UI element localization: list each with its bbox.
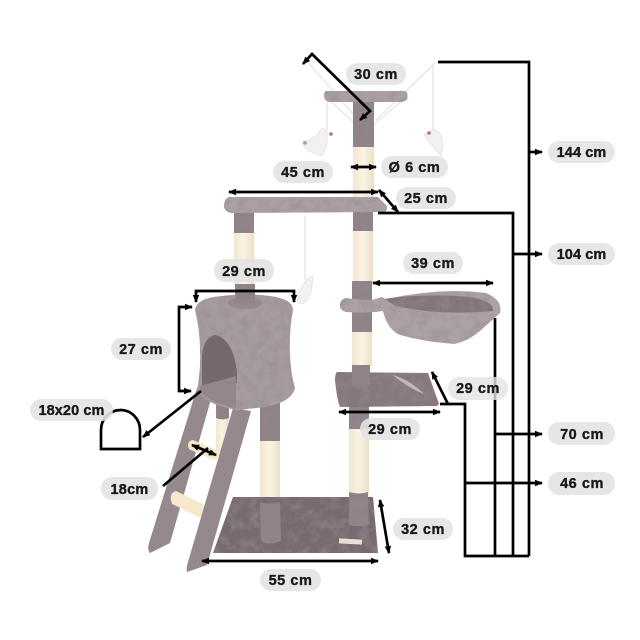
rear ladder rail — [148, 388, 213, 553]
arrow: 6 cm diameter — [351, 166, 376, 168]
label: 25 cm — [396, 187, 456, 209]
label: 104 cm: 104 cm — [557, 247, 606, 263]
top platform — [324, 91, 408, 102]
144 cm leader — [438, 62, 529, 556]
label: 25 cm: 25 cm — [404, 191, 448, 207]
plush post sections — [216, 101, 374, 544]
label: 29 cm shelf width: 29 cm — [368, 422, 412, 438]
label: 18x20 cm — [30, 399, 113, 421]
arrow to 46 cm — [465, 482, 542, 484]
label: 39 cm: 39 cm — [411, 256, 455, 272]
70 cm leader — [494, 318, 496, 556]
label: diameter 6 cm — [381, 156, 448, 178]
label: 18x20 cm: 18x20 cm — [38, 403, 105, 419]
arrow: 29 cm shelf width — [339, 411, 440, 413]
label: 45 cm: 45 cm — [281, 165, 325, 181]
label: 29 cm shelf depth — [448, 377, 508, 400]
base board — [213, 497, 378, 553]
hanging toys: strings and mice — [297, 60, 443, 304]
label: 144 cm: 144 cm — [557, 145, 606, 161]
arrow: 29 cm shelf depth — [432, 372, 448, 404]
arrow: 32 cm base depth — [380, 500, 389, 553]
hammock — [340, 291, 500, 344]
label: 70 cm: 70 cm — [560, 427, 604, 443]
arrow: 25 cm depth — [379, 190, 398, 212]
arrow: door to icon — [143, 391, 201, 437]
label: 45 cm — [273, 161, 333, 183]
104 cm leader — [378, 213, 513, 556]
label: 29 cm shelf depth: 29 cm — [456, 381, 500, 397]
label: 27 cm — [111, 338, 171, 360]
label: 30 cm: 30 cm — [354, 67, 398, 83]
label: 32 cm: 32 cm — [401, 522, 445, 538]
house body — [195, 294, 295, 410]
arrow to 104 cm — [513, 253, 542, 255]
shelf highlight — [393, 375, 424, 394]
arrow: top platform 30 cm — [303, 54, 370, 120]
label: 18cm: 18cm — [111, 482, 148, 498]
front ladder rail — [187, 408, 251, 572]
arrow: 39 cm hammock — [373, 282, 493, 284]
dimension lines — [101, 54, 542, 561]
label: 29 cm house: 29 cm — [222, 264, 266, 280]
house floor — [200, 376, 236, 408]
post collar on house — [228, 297, 262, 309]
label: 55 cm — [260, 569, 321, 591]
label: 144 cm — [548, 141, 615, 163]
label: 104 cm — [548, 243, 615, 265]
label: 46 cm — [548, 472, 615, 495]
cat tree product illustration — [148, 60, 500, 572]
label: 32 cm — [393, 518, 453, 540]
cat house — [195, 284, 295, 410]
label: 46 cm: 46 cm — [560, 476, 604, 492]
label: 30 cm — [346, 63, 406, 85]
label: diameter 6 cm: Ø 6 cm — [389, 160, 440, 176]
arrow: 55 cm base width — [202, 560, 378, 562]
post through lower shelf — [352, 365, 370, 388]
arrow: 45 cm width — [229, 191, 378, 193]
icon: door outline — [101, 410, 140, 449]
label: 29 cm house — [214, 259, 274, 282]
ladder rungs — [171, 440, 218, 518]
leader: 18 cm rung — [163, 448, 208, 486]
middle platform — [224, 197, 387, 213]
lower shelf — [335, 372, 439, 407]
label tag on base — [339, 538, 362, 545]
arrow: 27 cm house height — [179, 307, 192, 391]
label: 55 cm: 55 cm — [269, 573, 312, 589]
label: 39 cm — [403, 252, 463, 274]
arrow to 144 cm — [529, 151, 542, 153]
main post and side posts: sisal sections — [216, 146, 374, 503]
label: 70 cm — [548, 422, 615, 445]
label: 18cm — [101, 477, 158, 500]
arrow to 70 cm — [495, 433, 542, 435]
arrow: 18 cm rung — [192, 445, 216, 455]
label: 27 cm: 27 cm — [119, 342, 163, 358]
arrow: 29 cm house width — [196, 291, 294, 302]
label: 29 cm shelf width — [360, 418, 420, 440]
46 cm leader — [440, 404, 529, 556]
house doorway — [202, 335, 237, 386]
